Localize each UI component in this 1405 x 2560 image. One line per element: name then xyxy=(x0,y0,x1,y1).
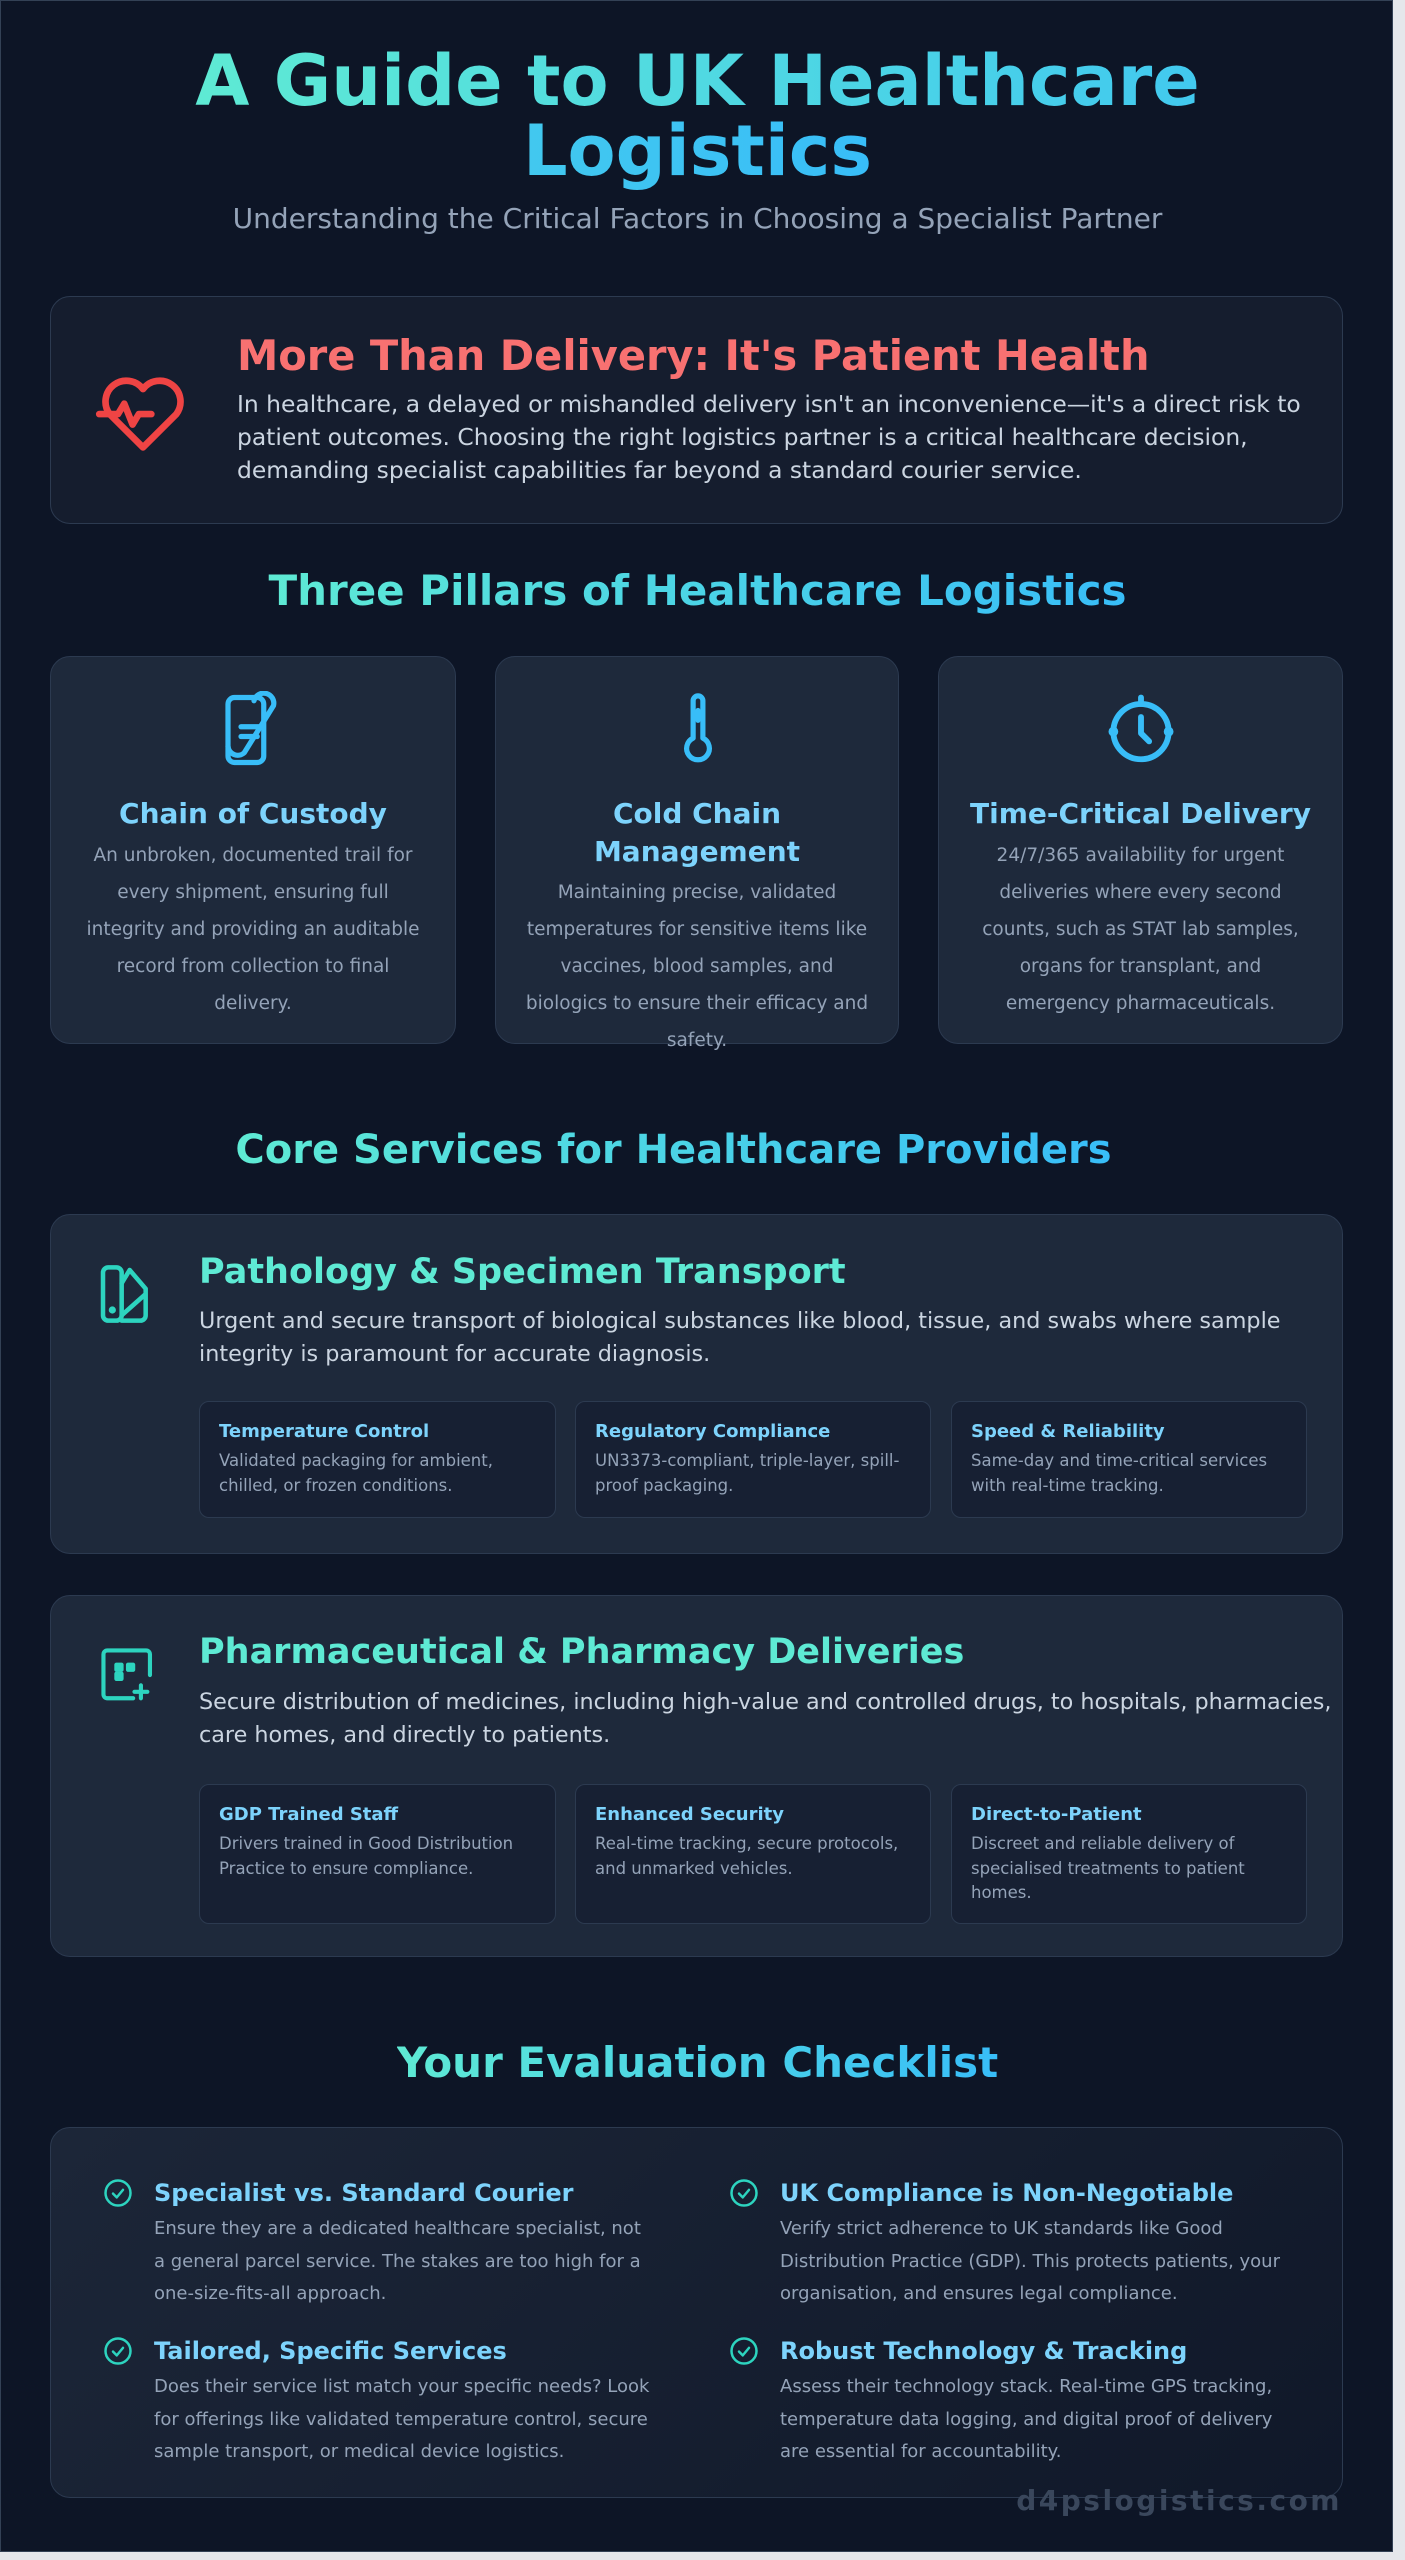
panel: checklist: Tailored, Specific Services xyxy=(154,2337,507,2365)
feature box: temperature: Validated packaging for ambient, chilled, or frozen conditions. xyxy=(219,1451,493,1494)
checklist item: tailored xyxy=(104,2337,650,2462)
panel: time-critical xyxy=(938,656,1343,1044)
title: Time-Critical Delivery xyxy=(970,797,1311,830)
feature box: direct: Direct-to-Patient xyxy=(971,1804,1142,1825)
description: Secure distribution of medicines, including high-value and controlled drugs, to hospitals, pharmacies, care homes, and directly to patients. xyxy=(199,1689,1332,1748)
panel: checklist: Robust Technology & Tracking xyxy=(780,2337,1187,2365)
description: Maintaining precise, validated temperatures for sensitive items like vaccines, blood samples, and biologics to ensure their efficacy and safety. xyxy=(526,882,868,1051)
feature box: regulatory xyxy=(575,1401,931,1518)
subtitle: Understanding the Critical Factors in Choosing a Specialist Partner xyxy=(233,202,1162,235)
feature box: temperature xyxy=(199,1401,556,1518)
checklist item: technology xyxy=(730,2337,1272,2462)
title: Management xyxy=(594,835,800,868)
watermark: d4pslogistics.com xyxy=(1016,2484,1342,2517)
text block: In healthcare, a delayed or mishandled delivery isn't an inconvenience—it's a direct risk to patient outcomes. Choosing the right logistics partner is a critical healthcare decision, demanding specialist capabilities far beyond a standard courier service. xyxy=(237,390,1301,484)
title: Cold Chain xyxy=(613,797,781,830)
checklist item: specialist xyxy=(104,2179,641,2304)
icon: specimen xyxy=(100,1265,148,1323)
icon: thermometer xyxy=(684,693,712,762)
panel: checklist: Specialist vs. Standard Courier xyxy=(154,2179,574,2207)
feature box: security: Real-time tracking, secure protocols, and unmarked vehicles. xyxy=(595,1834,898,1878)
panel: checklist: Assess their technology stack. Real-time GPS tracking, temperature data logging, and digital proof of delivery are essential for accountability. xyxy=(780,2376,1272,2462)
heading: three pillars: Three Pillars of Healthcare Logistics xyxy=(268,566,1127,615)
panel: pathology xyxy=(50,1214,1343,1554)
feature box: GDP xyxy=(199,1784,556,1924)
icon: documents link xyxy=(225,691,276,766)
heading: More Than Delivery: It's Patient Health xyxy=(237,331,1150,380)
feature box: security xyxy=(575,1784,931,1924)
title xyxy=(195,40,1200,192)
heading: Pharmaceutical & Pharmacy Deliveries xyxy=(199,1632,964,1672)
feature box: regulatory: Regulatory Compliance xyxy=(595,1421,830,1442)
feature box: regulatory: UN3373-compliant, triple-layer, spill-proof packaging. xyxy=(595,1451,899,1494)
feature box: GDP: GDP Trained Staff xyxy=(219,1804,398,1825)
heading: core services: Core Services for Healthcare Providers xyxy=(235,1127,1112,1173)
feature box: security: Enhanced Security xyxy=(595,1804,784,1825)
title: Logistics xyxy=(523,110,872,192)
feature box: GDP: Drivers trained in Good Distribution Practice to ensure compliance. xyxy=(219,1834,513,1878)
title: A Guide to UK Healthcare xyxy=(195,40,1200,122)
icon: stopwatch xyxy=(1108,694,1174,762)
heading: Pathology & Specimen Transport xyxy=(199,1252,846,1292)
description: Urgent and secure transport of biological substances like blood, tissue, and swabs where sample integrity is paramount for accurate diagnosis. xyxy=(199,1308,1280,1367)
description: 24/7/365 availability for urgent deliveries where every second counts, such as STAT lab samples, organs for transplant, and emergency pharmaceuticals. xyxy=(982,845,1299,1014)
panel: checklist: UK Compliance is Non-Negotiable xyxy=(780,2179,1233,2207)
panel: chain of custody xyxy=(50,656,456,1044)
feature box: temperature: Temperature Control xyxy=(219,1421,429,1442)
panel: checklist: Does their service list match your specific needs? Look for offerings like validated temperature control, secure sample transport, or medical device logistics. xyxy=(154,2376,649,2462)
panel: checklist xyxy=(50,2127,1343,2498)
panel: cold chain xyxy=(495,656,899,1044)
icon: heart with pulse xyxy=(96,377,184,451)
panel: checklist: Ensure they are a dedicated healthcare specialist, not a general parcel service. The stakes are too high for a one-size-fits-all approach. xyxy=(154,2218,641,2304)
heading: checklist: Your Evaluation Checklist xyxy=(397,2038,998,2087)
feature box: speed: Speed & Reliability xyxy=(971,1421,1165,1442)
icon: pharmacy xyxy=(101,1648,152,1700)
feature box: speed: Same-day and time-critical services with real-time tracking. xyxy=(971,1451,1267,1494)
description: An unbroken, documented trail for every shipment, ensuring full integrity and providing an auditable record from collection to final delivery. xyxy=(86,845,420,1014)
checklist item: compliance xyxy=(730,2179,1280,2304)
feature box: speed xyxy=(951,1401,1307,1518)
panel: intro xyxy=(50,296,1343,524)
feature box: direct xyxy=(951,1784,1307,1924)
panel: checklist: Verify strict adherence to UK standards like Good Distribution Practice (GDP). This protects patients, your organisation, and ensures legal compliance. xyxy=(780,2218,1280,2304)
panel: pharmaceutical xyxy=(50,1595,1343,1957)
feature box: direct: Discreet and reliable delivery of specialised treatments to patient homes. xyxy=(971,1834,1245,1902)
title xyxy=(594,797,800,868)
title: Chain of Custody xyxy=(119,797,387,830)
